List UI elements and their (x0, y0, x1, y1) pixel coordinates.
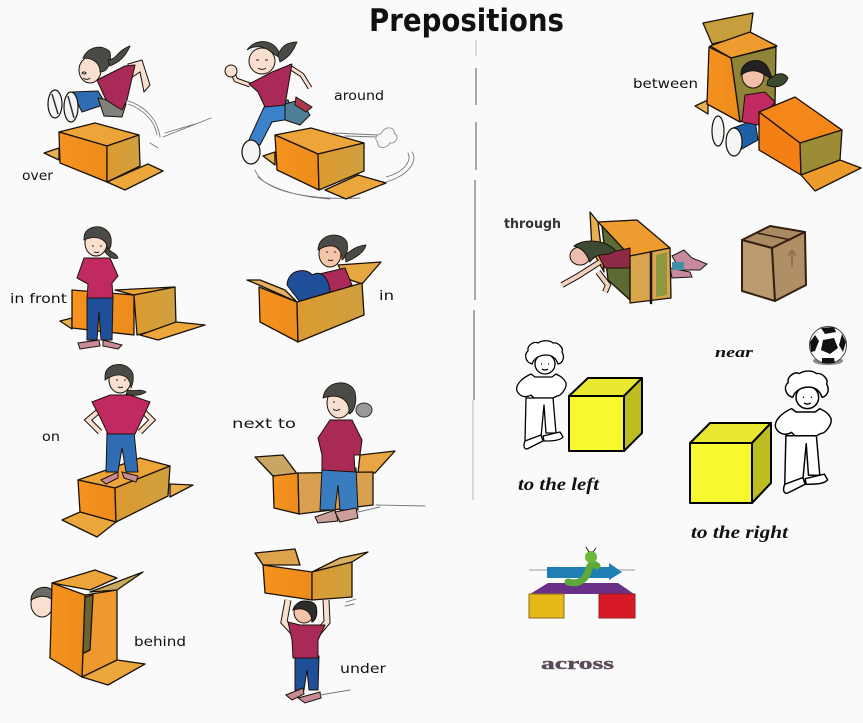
soccer ball (810, 326, 846, 365)
panel: to the right (690, 371, 831, 542)
label: between: between (633, 76, 698, 92)
girl standing (77, 227, 122, 349)
girl running (225, 42, 312, 164)
yellow cube (690, 423, 771, 503)
label: across: across (541, 654, 615, 673)
panel: to the left (517, 341, 642, 494)
panel: in front (10, 227, 205, 349)
upright box (695, 13, 777, 122)
bridge of blocks (529, 563, 635, 618)
box (263, 128, 386, 199)
box (62, 458, 193, 537)
label: on: on (42, 429, 60, 445)
cartoon boy (517, 341, 566, 449)
label: near: near (715, 345, 753, 361)
label: behind: behind (134, 634, 186, 650)
back flap (338, 262, 381, 284)
brown box (742, 226, 806, 301)
divider between columns (473, 40, 476, 500)
caterpillar (568, 547, 597, 583)
panel: next to (232, 383, 425, 523)
box (255, 451, 395, 514)
girl crawling (562, 241, 707, 292)
girl seated (712, 61, 788, 156)
girl peeking (31, 587, 53, 617)
label: around: around (334, 88, 384, 104)
box (50, 570, 145, 685)
cartoon boy (775, 371, 831, 493)
label: to the right: to the right (691, 522, 789, 542)
label: under: under (340, 661, 387, 677)
girl sitting in box (287, 235, 366, 302)
panel: across (529, 547, 635, 673)
box (60, 287, 205, 340)
label: in front: in front (10, 291, 67, 307)
box (44, 123, 163, 190)
ground shadow (358, 505, 425, 512)
girl standing on box (88, 364, 152, 484)
panel: under (255, 549, 387, 703)
motion and shadow lines (320, 599, 356, 695)
lying box (759, 97, 861, 191)
yellow cube (569, 378, 642, 451)
panel: behind (31, 570, 186, 685)
panel: on (42, 364, 193, 537)
panel: in (247, 235, 394, 342)
panel: through (504, 212, 707, 303)
box held up (255, 549, 368, 600)
girl standing beside box (315, 383, 372, 523)
motion swirl (255, 133, 414, 199)
label: over: over (22, 168, 53, 184)
box front (630, 248, 671, 303)
label: through: through (504, 216, 561, 232)
label: to the left: to the left (518, 474, 600, 494)
motion lines (125, 100, 211, 148)
label: next to: next to (232, 416, 296, 432)
puff of dust (376, 128, 397, 147)
panel: around (225, 42, 414, 199)
title: Prepositions (369, 3, 564, 39)
girl holding box (284, 600, 327, 703)
box (247, 280, 364, 342)
panel: between (633, 13, 861, 191)
girl jumping (48, 46, 150, 122)
panel: near (715, 226, 846, 365)
back flap and inside of box (590, 212, 670, 300)
panel: over (22, 46, 211, 190)
label: in: in (379, 288, 394, 304)
